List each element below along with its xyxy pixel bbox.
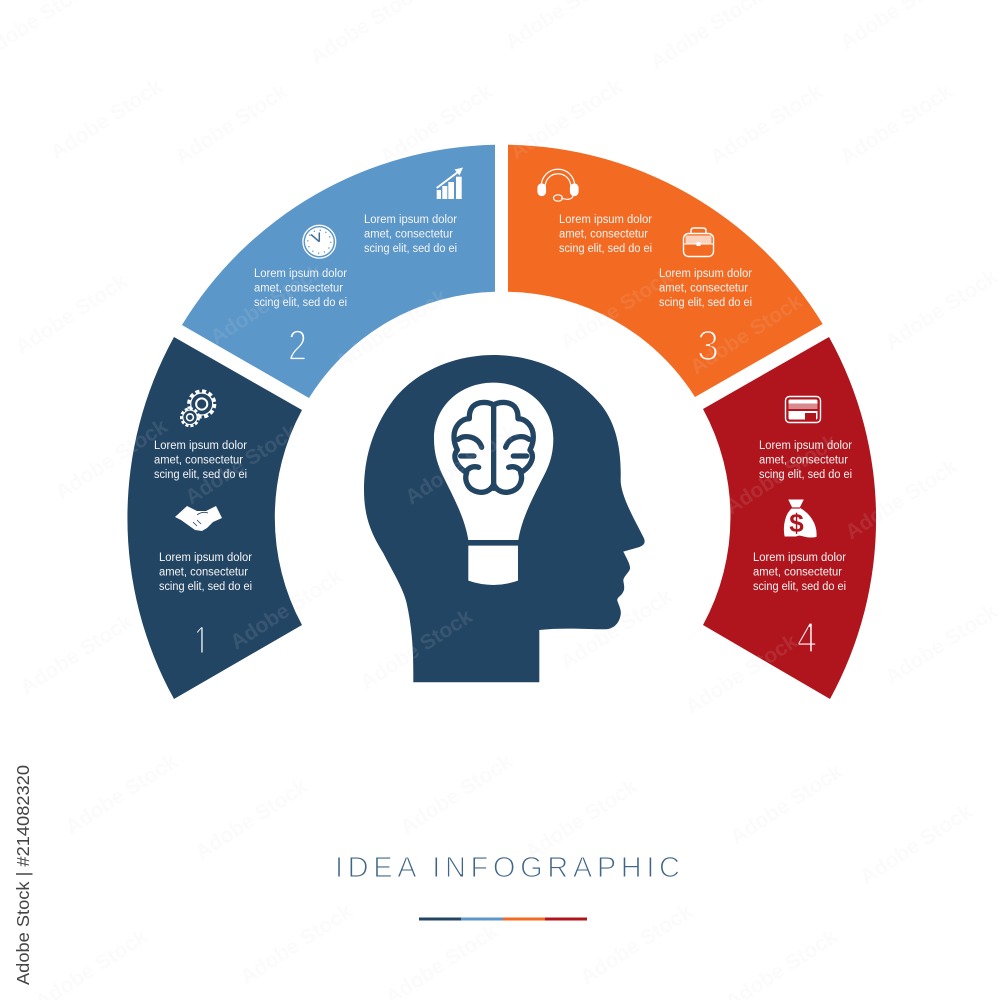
head [364, 355, 645, 682]
number 4: 4 [797, 614, 817, 662]
watermarks: Adobe Stock [836, 80, 957, 169]
panel 4: red segment [703, 337, 876, 699]
watermarks: Adobe Stock [11, 270, 132, 359]
number 1 [188, 618, 214, 666]
text block 2b [254, 268, 347, 309]
watermarks: Adobe Stock [721, 430, 842, 519]
text block 3a [559, 214, 652, 255]
head silhouette with light bulb and brain [364, 355, 645, 682]
text block 1a: Lorem ipsum dolor [154, 440, 247, 452]
watermarks: Adobe Stock [556, 585, 677, 674]
number 2: 2 [288, 322, 307, 370]
icon: handshake [175, 506, 222, 531]
text block 4b: Lorem ipsum dolor [753, 552, 846, 564]
watermarks: Adobe Stock [331, 285, 452, 374]
watermarks: Adobe Stock [881, 265, 1000, 354]
text block 1a [154, 440, 247, 481]
colour bar [419, 918, 587, 920]
text block 1b: amet, consectetur [159, 566, 248, 578]
text block 4b [753, 552, 846, 593]
watermarks: Adobe Stock [856, 800, 977, 889]
watermarks: Adobe Stock [16, 610, 137, 699]
text block 4a [759, 440, 852, 481]
icon: gears [181, 391, 214, 426]
panel 1: navy segment [127, 337, 302, 699]
text block 3a: amet, consectetur [559, 228, 648, 240]
watermarks: Adobe Stock [576, 900, 697, 989]
icon: money bag [784, 500, 816, 538]
text block 2b: amet, consectetur [254, 282, 343, 294]
text block 3a: Lorem ipsum dolor [559, 214, 652, 226]
watermarks: Adobe Stock [206, 260, 327, 349]
watermarks: Adobe Stock [521, 775, 642, 864]
text block 2b: scing elit, sed do ei [254, 297, 347, 309]
watermarks: Adobe Stock [396, 750, 517, 839]
watermarks: Adobe Stock [61, 750, 182, 839]
text block 3b [659, 268, 752, 309]
watermarks: Adobe Stock [726, 760, 847, 849]
watermarks: Adobe Stock [46, 75, 167, 164]
icon: headset [538, 169, 578, 201]
text block 1b: scing elit, sed do ei [159, 581, 252, 593]
text block 3b: scing elit, sed do ei [659, 297, 752, 309]
watermarks: Adobe Stock [226, 565, 347, 654]
text block 4b: scing elit, sed do ei [753, 581, 846, 593]
text block 2a: Lorem ipsum dolor [364, 214, 457, 226]
icon: clock [303, 225, 336, 258]
brain [454, 402, 533, 492]
icon: briefcase [684, 228, 714, 256]
number 3: 3 [697, 322, 719, 370]
watermarks: Adobe Stock [236, 900, 357, 989]
watermarks: Adobe Stock [51, 415, 172, 504]
text block 3b: amet, consectetur [659, 282, 748, 294]
bulb base [468, 546, 518, 585]
watermarks: Adobe Stock [681, 630, 802, 719]
icon: credit card [786, 396, 820, 422]
text block 2b: Lorem ipsum dolor [254, 268, 347, 280]
watermarks: Adobe Stock [881, 600, 1000, 689]
watermarks: Adobe Stock [376, 80, 497, 169]
text block 3b: Lorem ipsum dolor [659, 268, 752, 280]
text block 1b [159, 552, 252, 593]
watermarks: Adobe Stock [556, 265, 677, 354]
watermarks: Adobe Stock [356, 605, 477, 694]
text block 2a: amet, consectetur [364, 228, 453, 240]
watermarks: Adobe Stock [706, 80, 827, 169]
text block 4a: Lorem ipsum dolor [759, 440, 852, 452]
watermarks: Adobe Stock [401, 420, 522, 509]
text block 4b: amet, consectetur [753, 566, 842, 578]
watermarks: Adobe Stock [181, 420, 302, 509]
text block 1a: scing elit, sed do ei [154, 469, 247, 481]
light bulb [434, 383, 553, 540]
panel 2: blue segment [182, 145, 495, 398]
watermarks: Adobe Stock [191, 775, 312, 864]
watermarks: Adobe Stock [841, 455, 962, 544]
icon: money bag: $ [789, 508, 804, 538]
text block 3a: scing elit, sed do ei [559, 243, 652, 255]
side credit: Adobe Stock | #214082320 [13, 765, 33, 985]
text block 2a: scing elit, sed do ei [364, 243, 457, 255]
watermarks: Adobe Stock [506, 75, 627, 164]
text block 4a: amet, consectetur [759, 454, 848, 466]
panel 3: orange segment [508, 145, 823, 397]
title: IDEA INFOGRAPHIC [335, 852, 680, 884]
text block 2a [364, 214, 457, 255]
number 1: 1 [194, 618, 209, 666]
icon: growth chart [437, 168, 463, 199]
watermarks: Adobe Stock [686, 290, 807, 379]
text block 1a: amet, consectetur [154, 454, 243, 466]
watermarks: Adobe Stock [171, 80, 292, 169]
text block 4a: scing elit, sed do ei [759, 469, 852, 481]
text block 1b: Lorem ipsum dolor [159, 552, 252, 564]
